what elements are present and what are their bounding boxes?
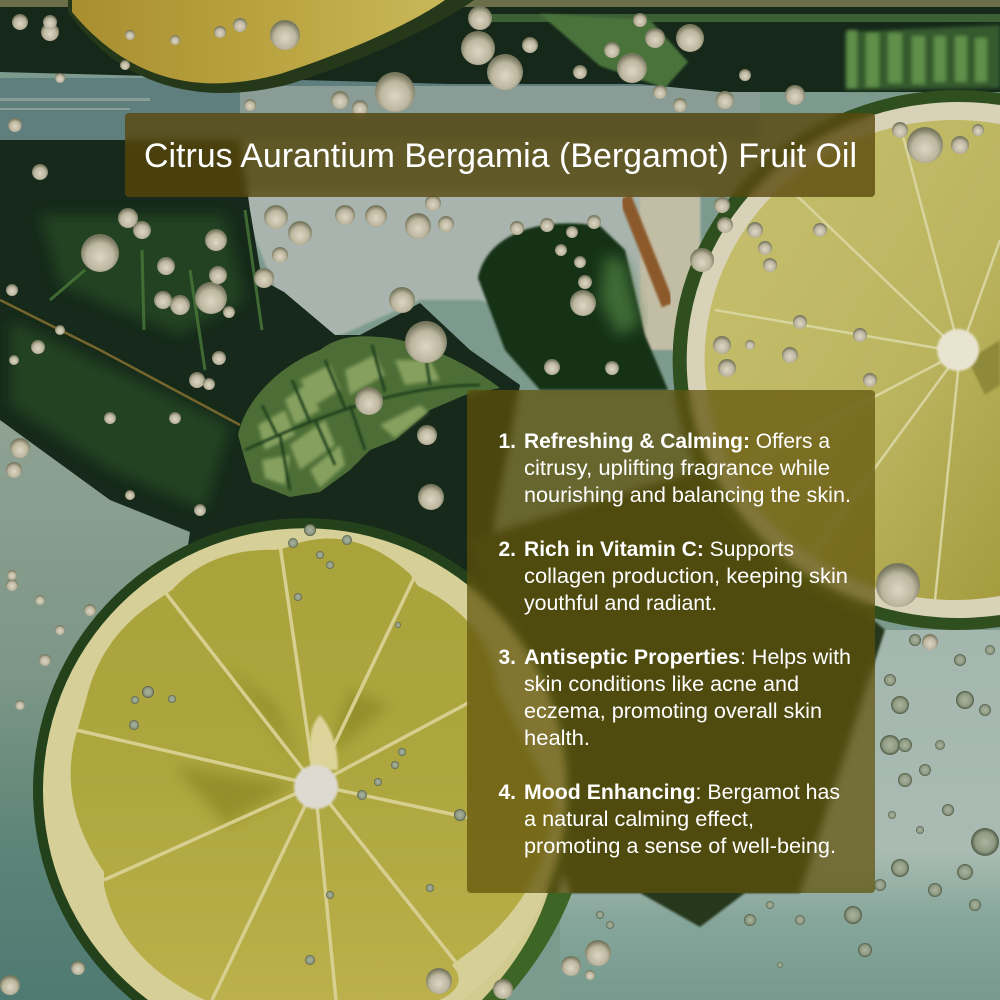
benefit 3: antiseptic properties: 3. bbox=[498, 646, 516, 669]
benefit 1: refreshing and calming: Refreshing & Calming: Offers a bbox=[524, 430, 830, 453]
serrated mint leaf, top right bbox=[845, 25, 1000, 90]
mint leaf bbox=[238, 336, 500, 497]
benefit 4: mood enhancing: 4. bbox=[498, 781, 516, 804]
dark leaf: centre with stem bbox=[478, 197, 668, 390]
upper stripe of water bbox=[0, 78, 760, 140]
lemon membranes bbox=[76, 545, 470, 1000]
title: Citrus Aurantium Bergamia (Bergamot) Fruit Oil bbox=[144, 137, 857, 175]
benefit 4: mood enhancing: promoting a sense of well-being. bbox=[524, 835, 836, 858]
benefit 2: rich in vitamin C: collagen production, keeping skin bbox=[524, 565, 848, 588]
benefit 1: refreshing and calming: citrusy, uplifting fragrance while bbox=[524, 457, 830, 480]
benefit 3: antiseptic properties: Antiseptic Properties: Helps with bbox=[524, 646, 851, 669]
benefit 3: antiseptic properties: eczema, promoting overall skin bbox=[524, 700, 822, 723]
benefit 4: mood enhancing: a natural calming effect, bbox=[524, 808, 754, 831]
benefit 2: rich in vitamin C: Rich in Vitamin C: Supports bbox=[524, 538, 794, 561]
benefit 2: rich in vitamin C: youthful and radiant. bbox=[524, 592, 717, 615]
light water behind leaves bbox=[235, 190, 700, 345]
small bubbles on lemons and water bbox=[129, 524, 999, 968]
benefit 3: antiseptic properties: skin conditions like acne and bbox=[524, 673, 799, 696]
benefit 2: rich in vitamin C: 2. bbox=[498, 538, 516, 561]
benefit 1: refreshing and calming: 1. bbox=[498, 430, 516, 453]
benefit 1: refreshing and calming: nourishing and balancing the skin. bbox=[524, 484, 851, 507]
benefit 3: antiseptic properties: health. bbox=[524, 727, 590, 750]
dark leaf: left bbox=[0, 140, 520, 600]
benefit 4: mood enhancing: Mood Enhancing: Bergamot has bbox=[524, 781, 840, 804]
mint leaf with bubbles, top centre bbox=[540, 14, 688, 88]
dark top band bbox=[0, 0, 1000, 92]
benefits panel bbox=[467, 390, 875, 893]
lemon slice: bottom left bbox=[33, 518, 577, 1000]
title panel bbox=[125, 113, 875, 197]
benefit 3: antiseptic properties bbox=[498, 646, 851, 750]
lemon segments bbox=[71, 538, 555, 1000]
benefit 4: mood enhancing bbox=[498, 781, 840, 858]
benefit 2: rich in vitamin C bbox=[498, 538, 848, 615]
dark leaf: bottom centre bbox=[470, 470, 885, 927]
lemon slice: right bbox=[673, 90, 1000, 630]
lemon slice: top left bbox=[68, 0, 474, 93]
benefit 1: refreshing and calming bbox=[498, 430, 851, 507]
